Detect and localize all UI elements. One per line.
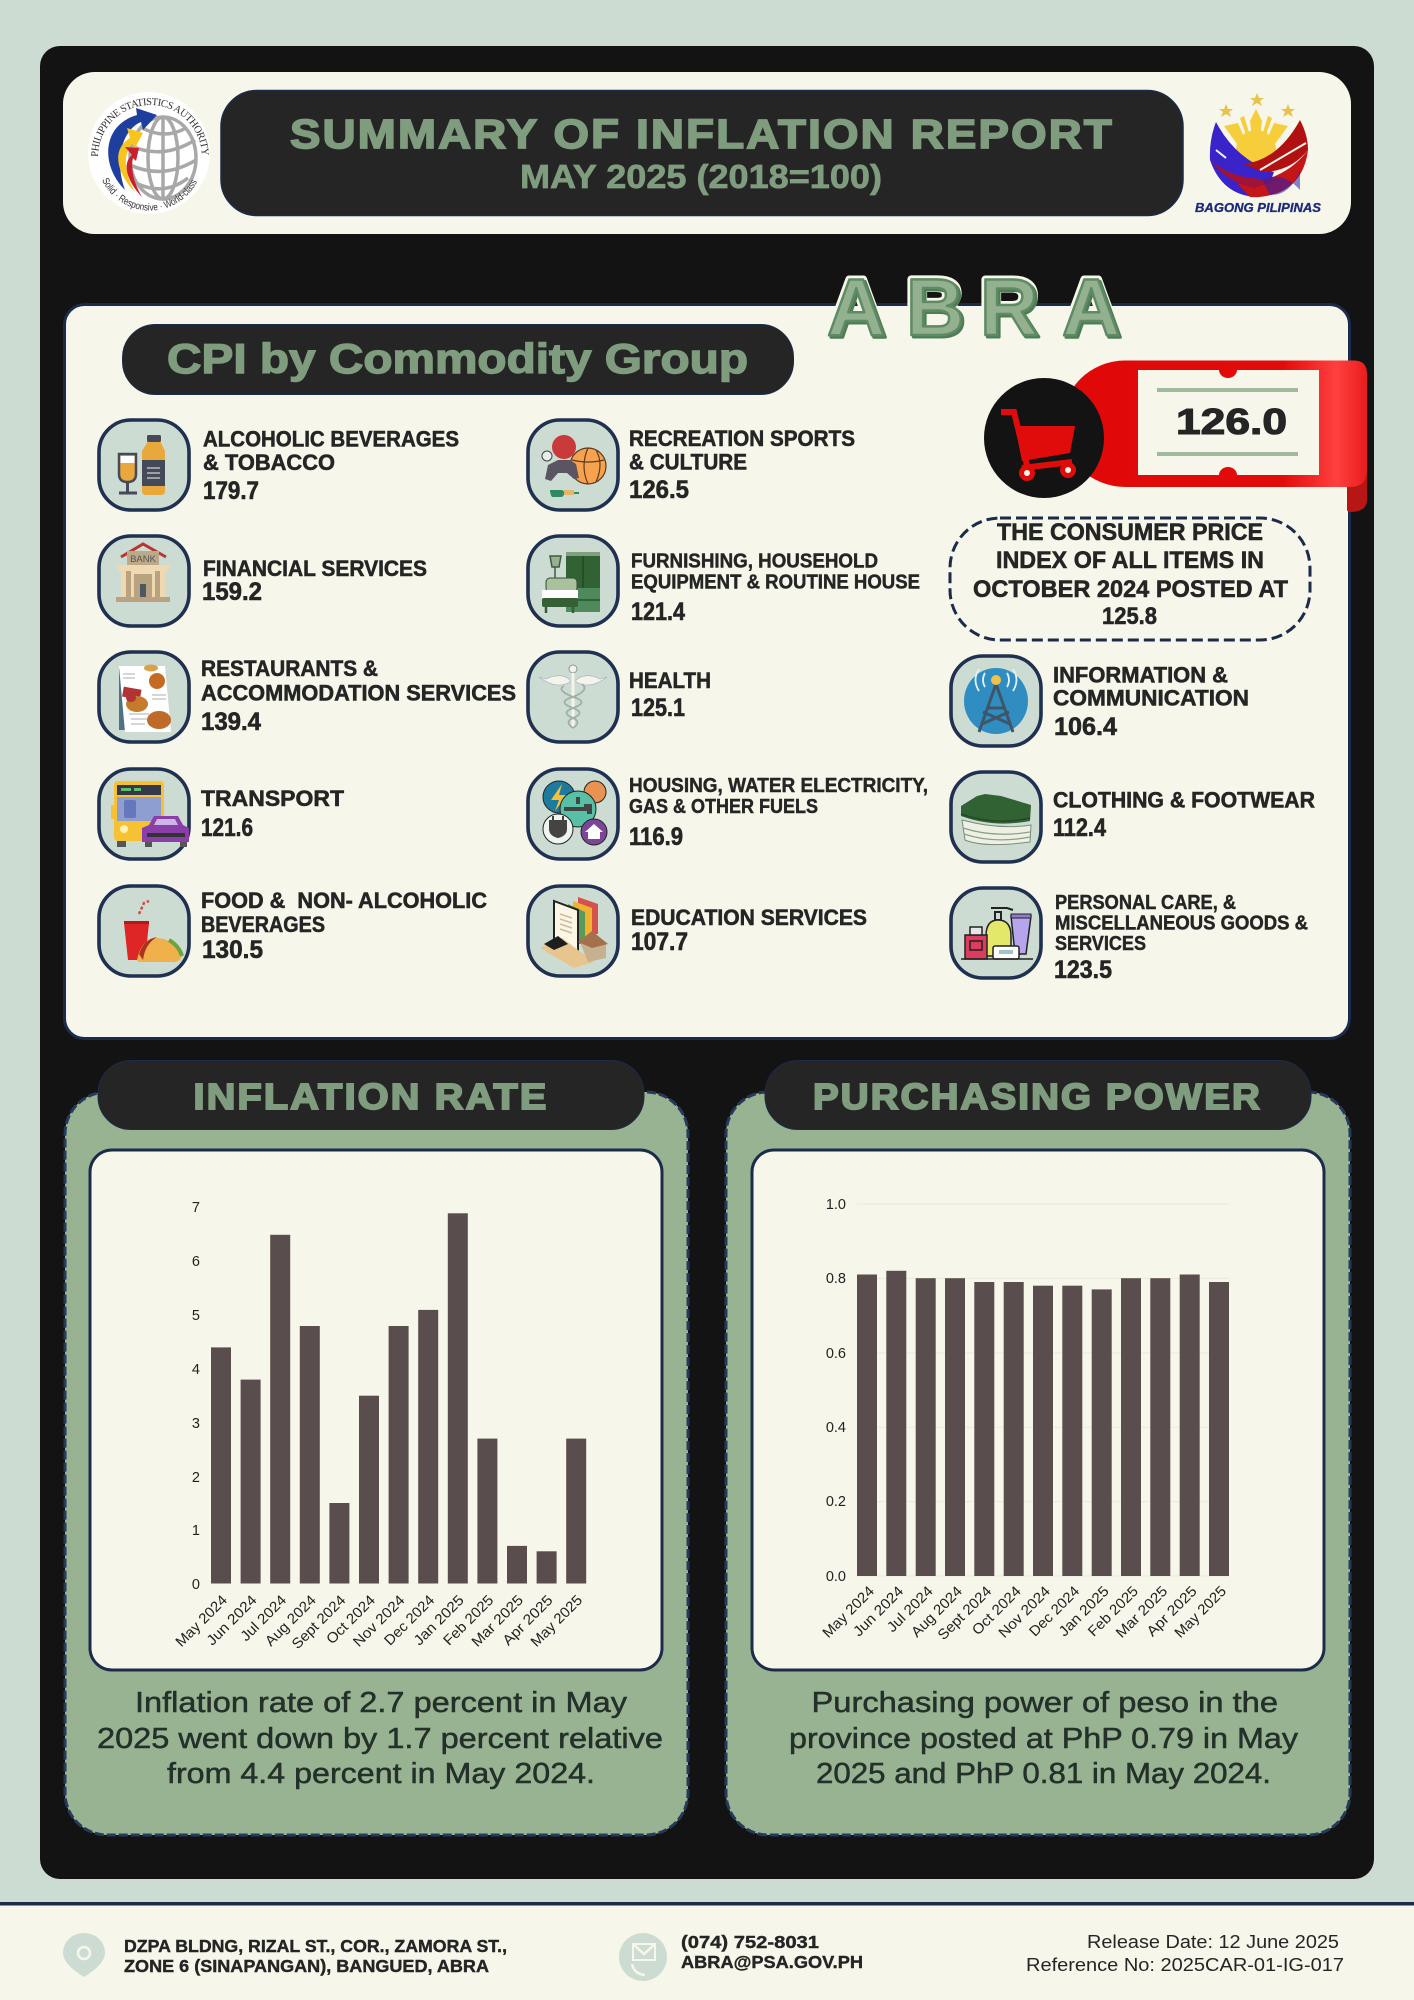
item: transport <box>99 769 345 859</box>
icon: antenna tower <box>951 656 1041 746</box>
x axis labels: Aug 2024 <box>909 1584 966 1641</box>
item: financial services <box>99 536 427 626</box>
item: clothing and footwear <box>951 772 1315 862</box>
x axis labels: Oct 2024 <box>969 1584 1025 1639</box>
x axis labels: Jan 2025 <box>411 1593 468 1649</box>
text: purchasing power summary <box>789 1687 1299 1790</box>
heading: CPI by Commodity Group <box>122 324 794 394</box>
logo: Philippine Statistics Authority: Solid · Responsive · World-class <box>102 178 197 211</box>
label: SERVICES <box>1055 933 1146 955</box>
label: RECREATION SPORTS <box>629 426 855 451</box>
icon: utilities <box>528 769 618 859</box>
label <box>631 550 920 626</box>
label <box>202 556 427 606</box>
x axis labels: Jul 2024 <box>884 1584 937 1636</box>
heading: purchasing power <box>765 1060 1311 1130</box>
label <box>201 656 516 736</box>
bars <box>211 1213 586 1584</box>
label: COMMUNICATION <box>1053 686 1249 710</box>
heading: CPI by Commodity Group: CPI by Commodity Group <box>167 335 748 382</box>
x axis labels: Feb 2025 <box>441 1593 497 1649</box>
item: recreation sports and culture <box>528 420 855 510</box>
label: 121.6 <box>201 814 253 842</box>
ABRA province heading: ABRA <box>827 263 1120 353</box>
CPI headline ribbon <box>984 360 1367 512</box>
callout: CPI of all items: INDEX OF ALL ITEMS IN <box>996 547 1264 574</box>
heading: inflation rate: INFLATION RATE <box>194 1076 548 1117</box>
y axis labels: 0 <box>192 1577 200 1593</box>
label: 130.5 <box>202 936 263 964</box>
x axis labels: Jan 2025 <box>1056 1584 1113 1640</box>
heading: inflation rate <box>98 1060 644 1130</box>
x axis labels: Oct 2024 <box>324 1593 379 1648</box>
subtitle: MAY 2025 (2018=100) <box>520 158 882 195</box>
label: 112.4 <box>1053 814 1106 842</box>
item: alcoholic beverages and tobacco <box>99 420 459 510</box>
heading: purchasing power: PURCHASING POWER <box>813 1076 1262 1117</box>
red ribbon <box>1062 360 1367 487</box>
x axis labels: Dec 2024 <box>381 1593 438 1649</box>
bars <box>857 1271 1229 1576</box>
address <box>124 1936 507 1976</box>
item: personal care and miscellaneous <box>951 888 1308 984</box>
bar chart: inflation rate <box>90 1150 662 1670</box>
x axis labels: Nov 2024 <box>996 1584 1054 1641</box>
icon: caduceus <box>528 652 618 742</box>
y axis labels: 7 <box>192 1200 200 1216</box>
icon: shopping cart <box>984 378 1104 498</box>
text: inflation summary: Inflation rate of 2.7 percent in May <box>135 1687 628 1719</box>
title bar <box>221 90 1183 216</box>
contact details: (074) 752-8031 <box>681 1932 819 1952</box>
y axis labels: 1 <box>192 1523 200 1539</box>
header banner <box>63 72 1351 234</box>
y axis labels: 3 <box>192 1416 200 1432</box>
callout: CPI of all items: OCTOBER 2024 POSTED AT <box>973 576 1288 603</box>
x axis labels: Sept 2024 <box>289 1593 349 1653</box>
label: PERSONAL CARE, & <box>1055 892 1236 914</box>
contact details: ABRA@PSA.GOV.PH <box>681 1952 863 1972</box>
item: restaurants and accommodation services <box>99 652 516 742</box>
label: ACCOMMODATION SERVICES <box>201 680 516 706</box>
y axis labels: 6 <box>192 1254 200 1270</box>
logo: Bagong Pilipinas: BAGONG PILIPINAS <box>1195 201 1322 215</box>
label: 121.4 <box>631 598 685 626</box>
label: INFORMATION & <box>1053 662 1228 688</box>
label: 139.4 <box>201 708 261 736</box>
icon: drink and taco <box>99 886 189 976</box>
item: furnishing and household equipment <box>528 536 920 626</box>
ABRA province heading: ABRA <box>827 263 1120 353</box>
x axis labels <box>820 1584 1230 1644</box>
y axis labels <box>192 1200 200 1593</box>
label <box>1053 788 1315 842</box>
x axis labels: Apr 2025 <box>500 1593 556 1649</box>
x axis labels: Jun 2024 <box>204 1593 260 1649</box>
label <box>203 426 459 505</box>
logo: Philippine Statistics Authority: PHILIPPINE STATISTICS AUTHORITY <box>91 98 209 157</box>
x axis labels <box>173 1593 586 1653</box>
label <box>1054 892 1308 984</box>
text: inflation summary <box>97 1687 663 1790</box>
text: inflation summary: from 4.4 percent in May 2024. <box>167 1758 595 1790</box>
label: & CULTURE <box>629 450 747 474</box>
icon: menu <box>99 652 189 742</box>
x axis labels: Aug 2024 <box>262 1593 320 1650</box>
y axis labels: 4 <box>192 1362 200 1378</box>
item: health <box>528 652 711 742</box>
icon: furniture <box>528 536 618 626</box>
label <box>201 888 487 964</box>
item: food and non-alcoholic beverages <box>99 886 487 976</box>
address: DZPA BLDNG, RIZAL ST., COR., ZAMORA ST., <box>124 1936 507 1956</box>
text: inflation summary: 2025 went down by 1.7 percent relative <box>97 1723 663 1755</box>
y axis labels <box>826 1197 846 1585</box>
y axis labels: 0.4 <box>826 1420 846 1436</box>
item: education services <box>528 886 867 976</box>
label: 159.2 <box>202 578 262 606</box>
label: HOUSING, WATER ELECTRICITY, <box>629 775 928 797</box>
panel: inflation rate <box>65 1060 688 1835</box>
label: & TOBACCO <box>203 450 335 475</box>
y axis labels: 0.6 <box>826 1346 846 1362</box>
address: ZONE 6 (SINAPANGAN), BANGUED, ABRA <box>124 1956 489 1976</box>
label: MISCELLANEOUS GOODS & <box>1055 912 1308 934</box>
logo: Bagong Pilipinas <box>1195 93 1322 215</box>
label: 107.7 <box>631 928 688 956</box>
label: TRANSPORT <box>201 786 345 811</box>
callout: CPI of all items: 125.8 <box>1102 603 1157 630</box>
x axis labels: Jun 2024 <box>851 1584 907 1640</box>
release information <box>1026 1932 1344 1975</box>
text: purchasing power summary: 2025 and PhP 0.81 in May 2024. <box>816 1758 1271 1790</box>
footer <box>0 1902 1414 2000</box>
label: 116.9 <box>629 823 683 851</box>
label: BEVERAGES <box>201 912 325 937</box>
ABRA province heading: ABRA <box>829 265 1122 355</box>
logo: Philippine Statistics Authority <box>88 92 210 214</box>
label: 125.1 <box>631 694 685 722</box>
panel: purchasing power <box>726 1060 1350 1835</box>
label <box>201 786 345 842</box>
x axis labels: Mar 2025 <box>469 1593 527 1650</box>
x axis labels: May 2024 <box>173 1593 231 1650</box>
icon: phone and mail <box>619 1933 667 1981</box>
y axis labels: 2 <box>192 1470 200 1486</box>
label: ALCOHOLIC BEVERAGES <box>203 426 459 452</box>
icon: folded clothes <box>951 772 1041 862</box>
label: 123.5 <box>1054 956 1112 984</box>
y axis labels: 0.8 <box>826 1271 846 1287</box>
text: purchasing power summary: province posted at PhP 0.79 in May <box>789 1723 1299 1755</box>
icon: bank: BANK <box>130 554 157 565</box>
callout: CPI of all items: THE CONSUMER PRICE <box>997 519 1263 546</box>
y axis labels: 0.2 <box>826 1494 846 1510</box>
icon: bus and car <box>99 769 189 859</box>
label: GAS & OTHER FUELS <box>629 796 818 818</box>
icon: bottle and glass <box>99 420 189 510</box>
x axis labels: Dec 2024 <box>1027 1584 1083 1640</box>
label <box>629 775 928 851</box>
ribbon fold <box>1347 470 1367 512</box>
y axis labels: 5 <box>192 1308 200 1324</box>
icon: location pin <box>63 1933 105 1977</box>
panel: CPI by commodity group <box>64 304 1367 1038</box>
y axis labels: 0.0 <box>826 1569 846 1585</box>
x axis labels: Nov 2024 <box>350 1593 408 1650</box>
label: EQUIPMENT & ROUTINE HOUSE <box>631 572 920 594</box>
label: FURNISHING, HOUSEHOLD <box>631 550 878 572</box>
label: RESTAURANTS & <box>201 656 378 681</box>
x axis labels: Jul 2024 <box>238 1593 290 1645</box>
callout: CPI of all items <box>950 518 1310 640</box>
label: FINANCIAL SERVICES <box>203 556 427 581</box>
label <box>1053 662 1249 741</box>
label: EDUCATION SERVICES <box>631 905 867 930</box>
icon: sports and games <box>528 420 618 510</box>
label: HEALTH <box>629 668 711 693</box>
x axis labels: May 2024 <box>820 1584 878 1641</box>
title: SUMMARY OF INFLATION REPORT <box>290 111 1114 157</box>
label <box>629 668 711 722</box>
ticket: 126.0 <box>1176 401 1287 442</box>
label: FOOD & NON- ALCOHOLIC <box>201 888 487 913</box>
bar chart: purchasing power <box>752 1150 1324 1670</box>
label: 179.7 <box>203 477 259 505</box>
item: housing, water, electricity, gas and other fuels <box>528 769 928 859</box>
label <box>629 426 855 504</box>
label: CLOTHING & FOOTWEAR <box>1053 788 1315 812</box>
y axis labels: 1.0 <box>826 1197 846 1213</box>
release information: Reference No: 2025CAR-01-IG-017 <box>1026 1955 1344 1975</box>
x axis labels: May 2025 <box>1172 1584 1230 1641</box>
release information: Release Date: 12 June 2025 <box>1087 1932 1339 1952</box>
x axis labels: Sept 2024 <box>935 1584 995 1644</box>
icon: cosmetics <box>951 888 1041 978</box>
label: 106.4 <box>1054 713 1117 741</box>
x axis labels: May 2025 <box>528 1593 586 1650</box>
x axis labels: Mar 2025 <box>1113 1584 1171 1641</box>
x axis labels: Apr 2025 <box>1144 1584 1201 1640</box>
icon: bank <box>99 536 189 626</box>
item: information and communication <box>951 656 1249 746</box>
icon: books and school <box>528 886 618 976</box>
x axis labels: Feb 2025 <box>1085 1584 1142 1640</box>
ticket <box>1138 370 1319 475</box>
label <box>631 905 867 956</box>
text: purchasing power summary: Purchasing power of peso in the <box>812 1687 1278 1719</box>
label: 126.5 <box>629 476 689 504</box>
contact details <box>681 1932 863 1972</box>
